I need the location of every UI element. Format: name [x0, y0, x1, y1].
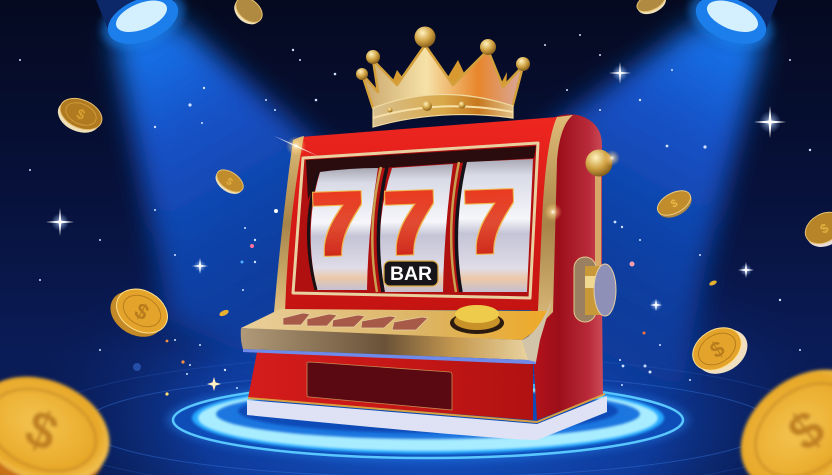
coin: right large: $ [705, 336, 729, 363]
BAR badge [384, 261, 438, 286]
coin: right middle [653, 186, 696, 223]
reel 1 [311, 168, 378, 290]
coin: top right [634, 0, 669, 18]
coin: tiny right [709, 279, 717, 287]
reel separators [308, 162, 465, 292]
left spotlight beam [113, 20, 440, 390]
seven symbols: 7 [462, 172, 518, 272]
seven symbols: 7 [382, 173, 438, 273]
slot machine [241, 26, 620, 440]
right gold trim [530, 115, 573, 335]
coin: small left: $ [74, 105, 88, 123]
coin: big foreground right [717, 342, 832, 475]
coin: left large [102, 278, 175, 347]
coin: far right [800, 206, 832, 254]
coin: left large: $ [130, 298, 153, 325]
lower base plate [247, 396, 607, 440]
coin: far right: $ [817, 220, 832, 237]
coin: big foreground left: $ [17, 399, 66, 463]
coin: top left [229, 0, 267, 30]
cabinet side [530, 114, 603, 420]
coin: tiny left [218, 309, 230, 317]
seven symbols: 7 [310, 174, 366, 274]
lower red body [248, 352, 605, 422]
deck buttons [283, 313, 428, 330]
reel 3 [457, 159, 533, 292]
right spotlight beam [420, 22, 765, 390]
sparkle stars [46, 62, 786, 391]
window top shadow [306, 146, 536, 200]
gold glints [274, 130, 620, 221]
spin button [450, 305, 504, 334]
crown [356, 26, 530, 127]
floor orbit lines [33, 355, 823, 475]
reel window frame [293, 143, 538, 298]
coin: big foreground left [0, 356, 126, 475]
coin: right middle: $ [669, 197, 680, 211]
coin tray slot [307, 362, 452, 410]
coin: mid left [211, 165, 247, 199]
lever [574, 150, 616, 322]
left gold trim [274, 136, 304, 312]
star field [19, 34, 811, 396]
glowing platform ring [166, 378, 690, 462]
left spotlight lamp [80, 0, 194, 61]
right spotlight lamp [680, 0, 794, 61]
coin: mid left: $ [224, 176, 235, 189]
BAR badge: BAR [390, 264, 432, 285]
cabinet front [277, 117, 557, 310]
control deck [241, 300, 552, 364]
coin: right large [685, 317, 756, 384]
coin: small left [53, 92, 107, 139]
reel 2 [380, 164, 453, 292]
seven symbols [310, 172, 518, 274]
